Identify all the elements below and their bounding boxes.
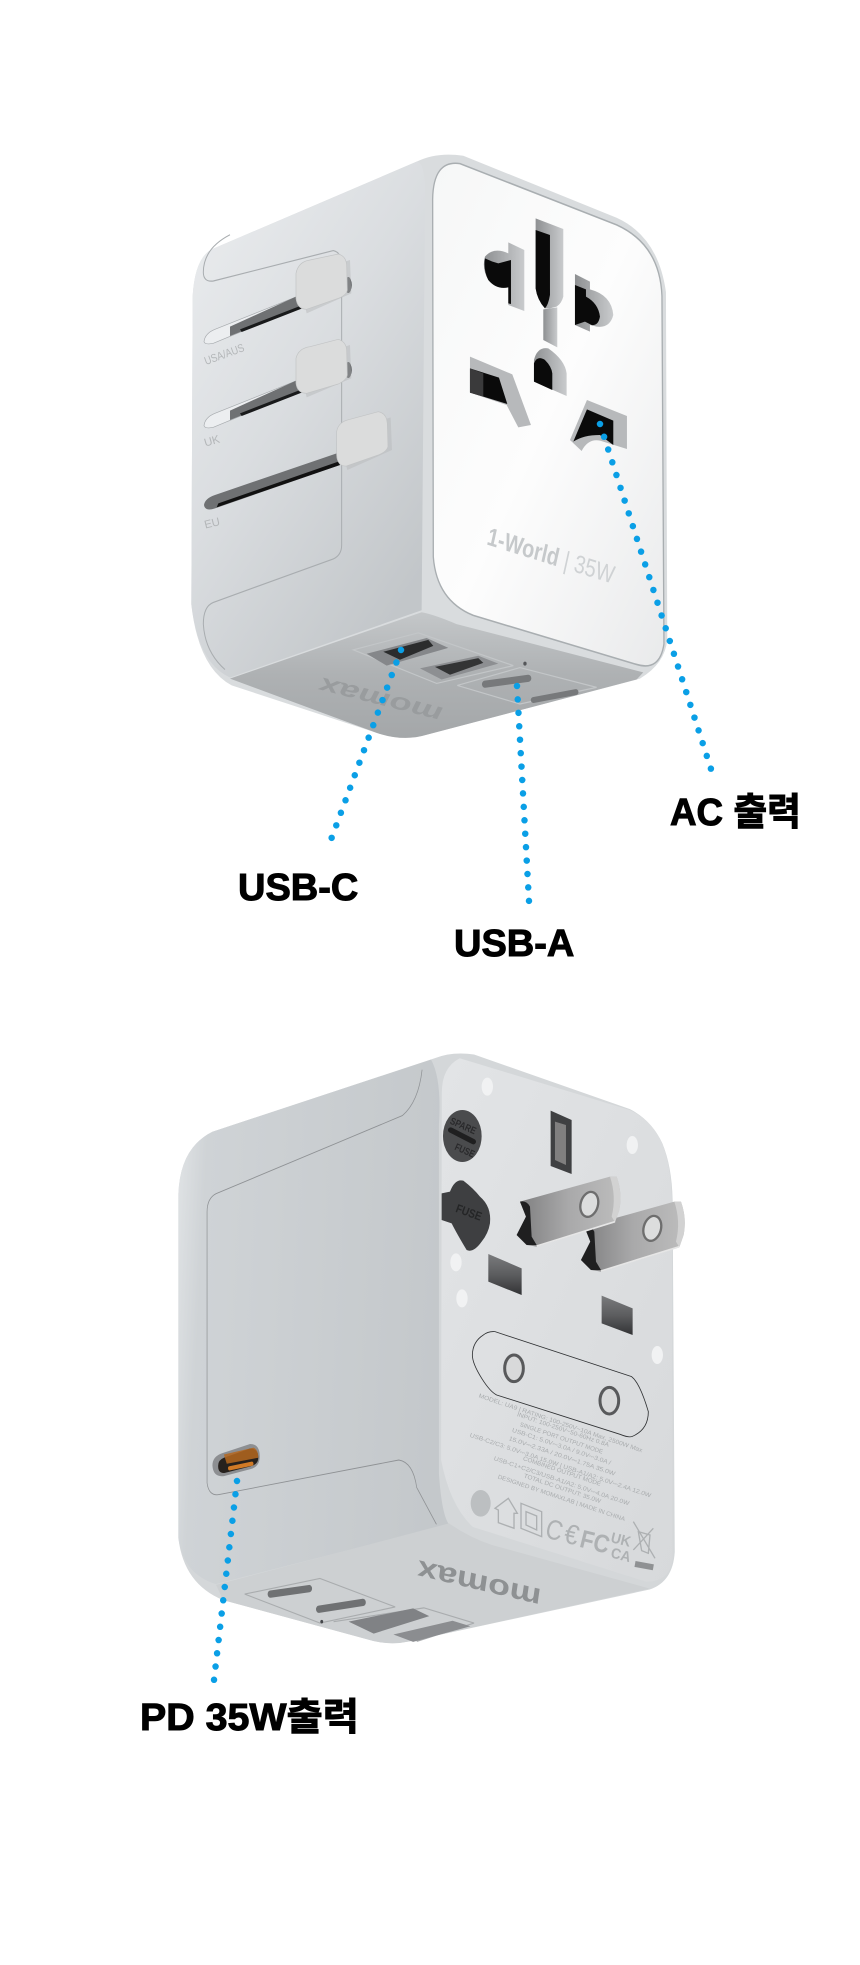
slider: EU — [204, 412, 392, 509]
momax logo on bottom: momax — [316, 671, 444, 729]
spare fuse cap — [443, 1110, 482, 1162]
rating specification text: TOTAL DC OUTPUT: 35.0W — [523, 1474, 602, 1505]
dotted pointer: AC output — [600, 424, 711, 769]
slider: UK — [204, 339, 352, 428]
rating specification text: SINGLE PORT OUTPUT MODE — [519, 1422, 603, 1456]
rating specification text: INPUT: 100-250V~50-60Hz 0.8A — [516, 1412, 610, 1449]
dotted pointer: USB-A — [517, 686, 529, 901]
plug prong left — [517, 1177, 620, 1247]
rating specification text: COMBINED OUTPUT MODE — [522, 1456, 601, 1488]
label: PD 35W output: PD 35W출력 — [140, 1697, 359, 1739]
rating specification text: USB-C2/C3: 5.0V⎓3.0A 15.0W | USB-A1/A2: 5.0V⎓2.4A 12.0W — [469, 1433, 652, 1500]
label: USB-C: USB-C — [238, 867, 358, 909]
rating specification text: 15.0V⎓2.33A / 20.0V⎓1.75A 35.0W — [508, 1436, 616, 1478]
CE FC UKCA marks: CA — [609, 1546, 633, 1566]
device body silhouette — [178, 1054, 675, 1643]
sliders and labels — [203, 254, 392, 532]
slider: USA/AUS — [204, 254, 352, 344]
power switch window — [551, 1111, 572, 1174]
rating specification text: DESIGNED BY MOMAXLAB | MADE IN CHINA — [497, 1475, 626, 1523]
slider label EU: EU — [203, 516, 221, 532]
fuse cap: FUSE — [454, 1201, 484, 1224]
CE FC UKCA marks: FC — [577, 1525, 612, 1560]
left side face — [191, 162, 425, 677]
certification icons — [471, 1490, 655, 1567]
upper plate hardware — [442, 1078, 685, 1364]
rating specification text: USB-C1+C2/C3/USB-A1/A2: 5.0V⎓4.0A 20.0W — [493, 1456, 630, 1508]
USB ports on bottom — [353, 633, 597, 704]
momax logo on bottom: momax — [415, 1554, 543, 1614]
back metal plate — [441, 1058, 673, 1582]
CE FC UKCA marks — [543, 1513, 633, 1566]
side panel outline — [203, 235, 342, 670]
rating specification text — [469, 1394, 652, 1523]
plug prong right — [581, 1202, 685, 1272]
plate logo text: 1-World | 35W — [485, 522, 617, 589]
CE FC UKCA marks: C — [543, 1513, 566, 1547]
lower plate markings — [469, 1332, 655, 1567]
dotted pointer: PD output — [214, 1481, 237, 1680]
front metal plate — [433, 163, 664, 666]
slider label USA/AUS: USA/AUS — [203, 342, 247, 368]
device body silhouette — [191, 155, 667, 738]
device: back view of adapter — [178, 1054, 685, 1643]
socket holes — [470, 218, 627, 451]
bottom face — [216, 1523, 650, 1643]
device: front view of adapter — [191, 155, 667, 738]
label: USB-A: USB-A — [454, 923, 574, 965]
EU pin recess — [472, 1332, 648, 1437]
left side face — [178, 1060, 449, 1584]
screw dots — [450, 1078, 663, 1364]
CE FC UKCA marks: € — [561, 1518, 583, 1551]
bottom face — [230, 612, 643, 738]
dotted pointer: USB-C — [332, 650, 401, 838]
rating specification text: MODEL: UA9 | RATING: 100-250V~10A Max, 2500W Max — [478, 1394, 643, 1454]
square pin holes — [488, 1254, 633, 1335]
USB ports on bottom — [245, 1578, 474, 1642]
spare fuse cap: SPARE — [448, 1116, 478, 1137]
fuse cap — [442, 1180, 490, 1251]
CE FC UKCA marks: UK — [609, 1530, 633, 1551]
label: AC output: AC 출력 — [670, 792, 801, 834]
spare fuse cap: FUSE — [453, 1142, 476, 1161]
rating specification text: USB-C1: 5.0V⎓3.0A / 9.0V⎓3.0A / — [511, 1428, 612, 1467]
slider label UK: UK — [203, 434, 222, 450]
USB-C PD port — [212, 1444, 260, 1476]
side panel outline — [207, 1070, 436, 1524]
